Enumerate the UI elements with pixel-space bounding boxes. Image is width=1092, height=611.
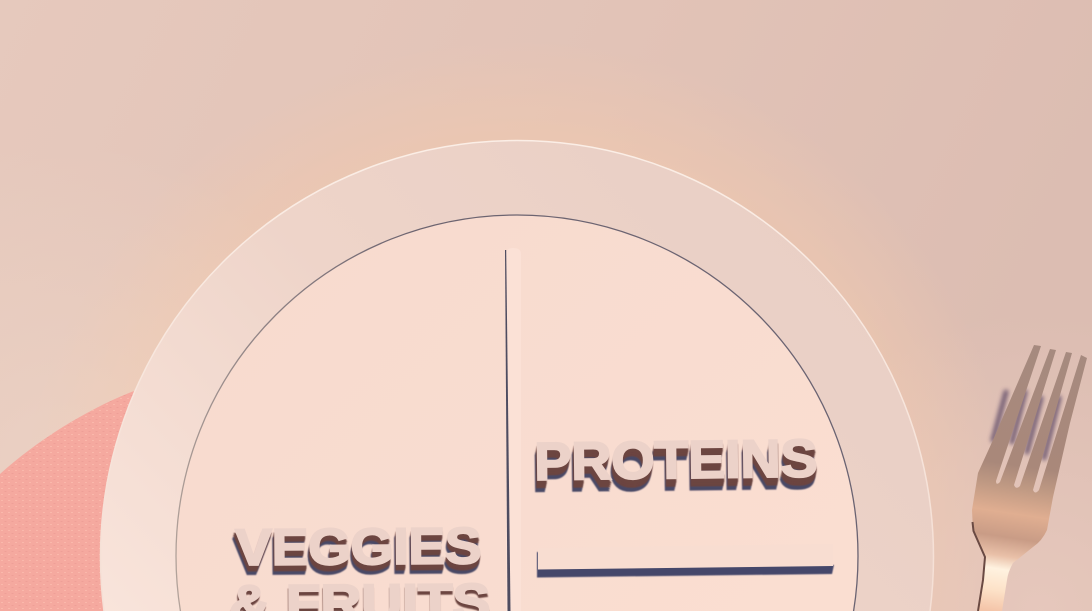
fork shadow [993,392,1059,458]
heading: proteins: PROTEINS [532,439,817,502]
heading: proteins: PROTEINS [532,441,816,504]
veggies line: VEGGIES [233,527,480,585]
veggies line: VEGGIES [234,523,481,582]
plate rim [100,140,934,611]
centre divider [505,248,521,611]
text placeholder bar [537,544,834,578]
plate inner well [176,215,858,611]
veggies line: VEGGIES [235,517,482,576]
heading: proteins: PROTEINS [533,435,818,498]
icon: fork [972,345,1087,611]
heading: proteins: PROTEINS [534,433,818,496]
heading: veggies and fruits [228,517,491,611]
plate [100,140,934,611]
heading: proteins: PROTEINS [533,437,817,500]
fork body [972,345,1087,611]
heading: proteins: PROTEINS [534,429,818,492]
fork edge [972,522,985,611]
veggies line: VEGGIES [234,521,482,580]
napkin [0,391,134,611]
veggies line: VEGGIES [233,525,481,584]
